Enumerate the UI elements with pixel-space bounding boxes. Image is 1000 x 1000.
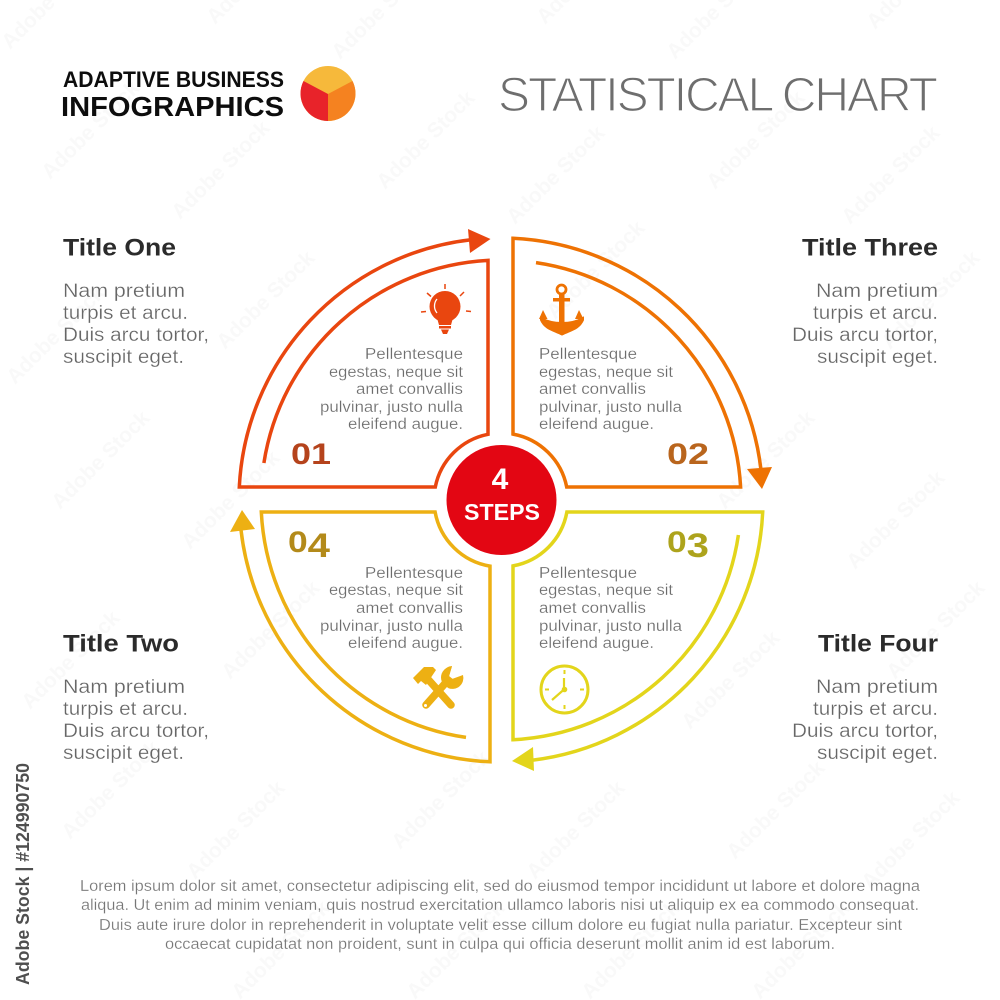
left text block: title two: suscipit eget. [63,743,184,764]
text: segment 02 description: Pellentesque [539,346,637,363]
center badge: 4 steps: STEPS [464,499,540,525]
left text block: title two: Title Two [63,630,179,658]
text: Adobe Stock [47,406,155,514]
segment 03 outline with arc arrow [512,512,763,771]
text: Adobe Stock [177,446,285,554]
left text block: title one: suscipit eget. [63,347,184,368]
number 02: 02 [667,438,709,471]
left text block: title one: Duis arcu tortor, [63,325,209,346]
text: segment 04 description: egestas, neque sit [329,582,464,599]
left text block: title one: Nam pretium [63,281,185,302]
icon: brand pie logo [300,66,356,121]
number 04: 0 [288,526,305,559]
text: Adobe Stock [542,216,650,324]
right text block: title three: Duis arcu tortor, [792,325,938,346]
text: segment 01 description: pulvinar, justo nulla [320,399,463,416]
text: Adobe Stock [502,121,610,229]
number 01: 01 [291,438,331,471]
segment 02 outline with arc arrow [513,238,772,489]
left text block: title two [63,630,209,764]
stock credit vertical text: Adobe Stock | #124990750 [13,763,33,985]
icon: clock [541,666,588,713]
text: segment 01 description: eleifend augue. [348,416,463,433]
main heading: STATISTICAL CHART [498,69,938,122]
text: segment 02 description: eleifend augue. [539,416,654,433]
number 04: 4 [308,527,330,565]
footer paragraph: occaecat cupidatat non proident, sunt in culpa qui officia deserunt mollit anim id est laborum. [165,936,835,953]
text: segment 04 description: amet convallis [356,600,463,617]
text: Adobe Stock [837,121,945,229]
text: Adobe Stock [882,576,990,684]
left text block: title one: turpis et arcu. [63,303,188,324]
footer paragraph: Lorem ipsum dolor sit amet, consectetur adipiscing elit, sed do eiusmod tempor incididunt ut labore et dolore magna [80,878,920,895]
text: Adobe Stock [522,776,630,884]
text: segment 04 description: Pellentesque [365,565,463,582]
text: Adobe Stock [712,406,820,514]
text: Adobe Stock [167,116,275,224]
footer paragraph: Duis aute irure dolor in reprehenderit in voluptate velit esse cillum dolore eu fugiat nulla pariatur. Excepteur sint [99,917,903,934]
left text block: title two: turpis et arcu. [63,699,188,720]
text: Adobe Stock [37,76,145,184]
segment 01 outline with arc arrow [239,229,490,487]
text: Adobe Stock [387,746,495,854]
text: segment 03 description: Pellentesque [539,565,637,582]
text: Adobe Stock [722,756,830,864]
text: segment 02 description: egestas, neque sit [539,364,674,381]
text: Adobe Stock [217,576,325,684]
center badge: 4 steps: 4 [492,463,509,496]
center badge: 4 steps [446,445,556,555]
right text block: title three: suscipit eget. [817,347,938,368]
brand logo title: INFOGRAPHICS [61,91,284,122]
text: segment 04 description [320,565,464,652]
text: Adobe Stock [17,606,125,714]
right text block: title three: Nam pretium [816,281,938,302]
panel: segment 04 [230,510,490,762]
right text block: title three: Title Three [802,234,938,262]
text: Adobe Stock [372,86,480,194]
text: Adobe Stock [677,626,785,734]
right text block: title four [792,630,938,764]
text: segment 02 description: pulvinar, justo nulla [539,399,682,416]
text: segment 03 description: egestas, neque sit [539,582,674,599]
panel: segment 03 [512,512,763,771]
right text block: title four: Title Four [818,630,938,658]
text: segment 01 description: amet convallis [356,381,463,398]
left text block: title two: Nam pretium [63,677,185,698]
right text block: title four: Duis arcu tortor, [792,721,938,742]
right text block: title three: turpis et arcu. [813,303,938,324]
text: segment 03 description: amet convallis [539,600,646,617]
text: Adobe Stock [2,281,110,389]
text: segment 01 description: egestas, neque sit [329,364,464,381]
text: Adobe Stock [842,466,950,574]
text: segment 04 description: eleifend augue. [348,635,463,652]
text: Adobe Stock [857,786,965,894]
text: segment 03 description [539,565,682,652]
number 03: 3 [687,527,709,565]
left text block: title one: Title One [63,234,176,262]
text: segment 02 description [539,346,682,433]
panel: segment 01 [239,229,490,487]
text: Adobe Stock [877,246,985,354]
segment 04 outline with arc arrow [230,510,490,762]
text: Adobe Stock [57,736,165,844]
brand logo title [61,67,284,122]
right text block: title three [792,234,938,368]
panel: segment 02 [513,238,772,489]
text: segment 01 description: Pellentesque [365,346,463,363]
number 03: 0 [667,526,684,559]
right text block: title four: suscipit eget. [817,743,938,764]
left text block: title one [63,234,209,368]
text: segment 04 description: pulvinar, justo nulla [320,618,463,635]
footer paragraph: aliqua. Ut enim ad minim veniam, quis nostrud exercitation ullamco laboris nisi ut aliquip ex ea commodo consequat. [81,897,919,914]
brand logo title: ADAPTIVE BUSINESS [63,67,284,92]
text: segment 03 description: pulvinar, justo nulla [539,618,682,635]
icon: anchor [539,285,584,334]
text: segment 02 description: amet convallis [539,381,646,398]
right text block: title four: turpis et arcu. [813,699,938,720]
right text block: title four: Nam pretium [816,677,938,698]
text: Adobe Stock [212,246,320,354]
text: Adobe Stock [182,776,290,884]
text: segment 03 description: eleifend augue. [539,635,654,652]
footer paragraph [80,878,920,953]
icon: hammer and wrench [413,663,467,707]
left text block: title two: Duis arcu tortor, [63,721,209,742]
text: segment 01 description [320,346,464,433]
icon: light bulb [421,284,471,334]
text: Adobe Stock [702,86,810,194]
